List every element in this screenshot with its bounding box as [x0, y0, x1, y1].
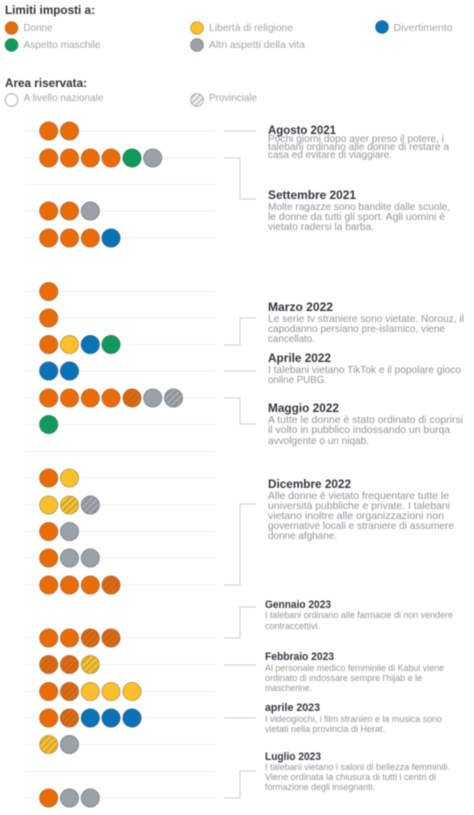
text block: Luglio 2023: Luglio 2023 — [265, 751, 321, 763]
row: aprile 2023 — [40, 709, 141, 727]
text block: Dicembre 2022: Alle donne è vietato frequentare tutte le — [268, 491, 449, 502]
connector: Dicembre 2022 — [224, 504, 256, 585]
text block: Dicembre 2022: Dicembre 2022 — [268, 477, 351, 491]
connector: Settembre 2021 — [224, 158, 256, 199]
text block: Luglio 2023: I talebani vietano i saloni di bellezza femminili. — [265, 762, 450, 773]
row: Febbraio 2023 — [40, 656, 99, 674]
row: Agosto 2021 a — [40, 122, 78, 140]
text block: Dicembre 2022: vietano inoltre alle organizzazioni non — [268, 511, 444, 522]
text block: Dicembre 2022: governative locali e straniere di assumere — [268, 521, 454, 532]
text block: Gennaio 2023: I talebani ordinano alle farmacie di non vendere — [265, 610, 453, 621]
connector: Maggio 2022 — [224, 398, 256, 424]
legend item: Altri aspetti della vita: Altri aspetti della vita — [209, 40, 305, 51]
text block: Dicembre 2022: università pubbliche e private. I talebani — [268, 501, 450, 512]
text block: Agosto 2021 — [268, 123, 449, 161]
legend item: Divertimento — [376, 21, 453, 34]
text block: aprile 2023: I videogiochi, i film stranieri e la musica sono — [265, 714, 442, 725]
text block: Dicembre 2022 — [268, 477, 454, 542]
text block: Febbraio 2023: Febbraio 2023 — [265, 651, 334, 663]
connector: Agosto 2021 — [224, 130, 256, 132]
text block: Gennaio 2023: Gennaio 2023 — [265, 599, 331, 611]
text block: Maggio 2022: A tutte le donne è stato ordinato di coprirsi — [268, 415, 463, 426]
row: Settembre 2021 a — [40, 202, 99, 220]
row: 478 — [40, 469, 78, 487]
row: Maggio 2022 — [40, 389, 183, 407]
connector: Marzo 2022 — [224, 318, 256, 345]
legend item: Donne — [5, 22, 53, 34]
connector: Aprile 2022 — [224, 370, 256, 372]
timeline grid lines — [25, 131, 216, 798]
text block: Febbraio 2023: mascherine. — [265, 683, 312, 694]
row: 558 — [40, 549, 99, 567]
connector: Febbraio 2023 — [224, 664, 256, 666]
connector: Luglio 2023 — [224, 771, 256, 798]
row: 745 — [40, 736, 78, 754]
text block: Febbraio 2023 — [265, 651, 444, 694]
text block: Marzo 2022: capodanno persiano pre-islamico, viene — [268, 324, 445, 335]
row: Luglio 2023 — [40, 789, 99, 807]
row: Marzo 2022 — [40, 336, 120, 354]
connector: aprile 2023 — [224, 717, 256, 719]
text block: Marzo 2022 — [268, 300, 464, 345]
text block: Marzo 2022: Le serie tv straniere sono vietate. Norouz, il — [268, 314, 464, 325]
row: Agosto 2021 b — [40, 149, 162, 167]
connector: Gennaio 2023 — [224, 607, 256, 638]
legend item: Divertimento: Divertimento — [394, 23, 453, 34]
text block: Agosto 2021: Pochi giorni dopo aver preso il potere, i — [268, 134, 444, 145]
text block: Agosto 2021: Agosto 2021 — [268, 123, 336, 137]
row: 318 — [40, 309, 58, 327]
text block: Agosto 2021: talebani ordinano alle donne di restare a — [268, 142, 449, 153]
text block: Agosto 2021: casa ed evitare di viaggiare. — [268, 150, 392, 161]
text block: Gennaio 2023: contraccettivi. — [265, 621, 320, 632]
row: 425 — [40, 416, 58, 434]
text block: Aprile 2022: online PUBG. — [268, 375, 327, 386]
row: Dicembre 2022 — [40, 576, 120, 594]
row: 691 — [40, 682, 141, 700]
text block: Maggio 2022: il volto in pubblico indossando un burqa — [268, 425, 450, 436]
text block: Luglio 2023: Viene ordinata la chiusura di tutti i centri di — [265, 772, 436, 783]
text block: Maggio 2022 — [268, 401, 463, 447]
legend: limits imposed — [5, 3, 453, 51]
text block: aprile 2023: aprile 2023 — [265, 702, 320, 714]
legend heading: Limiti imposti a: Limiti imposti a: — [5, 3, 95, 17]
text block: Marzo 2022: Marzo 2022 — [268, 300, 333, 314]
text block: Aprile 2022 — [268, 351, 461, 386]
legend item: Aspetto maschile: Aspetto maschile — [24, 40, 101, 51]
text block: Luglio 2023 — [265, 751, 450, 793]
text block: Aprile 2022: I talebani vietano TikTok e il popolare gioco — [268, 365, 461, 376]
text block: Marzo 2022: cancellato. — [268, 334, 315, 345]
text block: aprile 2023 — [265, 702, 442, 735]
legend item: A livello nazionale — [5, 93, 104, 106]
legend: reserved area — [5, 76, 257, 106]
legend item: Libertà di religione: Libertà di religione — [209, 23, 293, 34]
row: Gennaio 2023 — [40, 629, 120, 647]
text block: Settembre 2021: Molte ragazze sono bandite dalle scuole, — [268, 202, 450, 213]
text block: Maggio 2022: avvolgente o un niqab. — [268, 436, 369, 447]
dot chart: restrictions per month — [40, 122, 183, 807]
legend item: A livello nazionale: A livello nazionale — [24, 93, 104, 104]
legend item: Provinciale: Provinciale — [209, 93, 257, 104]
row: Aprile 2022 — [40, 362, 78, 380]
text block: Maggio 2022: Maggio 2022 — [268, 401, 339, 415]
text block: Settembre 2021: vietato radersi la barba. — [268, 222, 374, 233]
row: 531 — [40, 522, 78, 540]
row: Settembre 2021 b — [40, 229, 120, 247]
legend heading: Area riservata: Area riservata: — [5, 76, 87, 90]
text block: Settembre 2021 — [268, 188, 450, 233]
text block: Febbraio 2023: ordinato di indossare sempre l'hijab e le — [265, 673, 422, 684]
text block: Gennaio 2023 — [265, 599, 453, 632]
legend item: Donne: Donne — [24, 23, 53, 34]
text block: Luglio 2023: formazione degli insegnanti. — [265, 782, 375, 793]
legend item: Provinciale — [191, 93, 257, 106]
text block: Aprile 2022: Aprile 2022 — [268, 351, 331, 365]
row: 505 — [40, 496, 99, 514]
text block: Febbraio 2023: Al personale medico femminile di Kabul viene — [265, 663, 444, 674]
text block: aprile 2023: vietati nella provincia di Herat. — [265, 724, 385, 735]
text block: Settembre 2021: le donne da tutti gli sport. Agli uomini è — [268, 212, 445, 223]
row: 291 — [40, 282, 58, 300]
text block: Settembre 2021: Settembre 2021 — [268, 188, 356, 202]
text block: Dicembre 2022: donne afghane. — [268, 531, 337, 542]
